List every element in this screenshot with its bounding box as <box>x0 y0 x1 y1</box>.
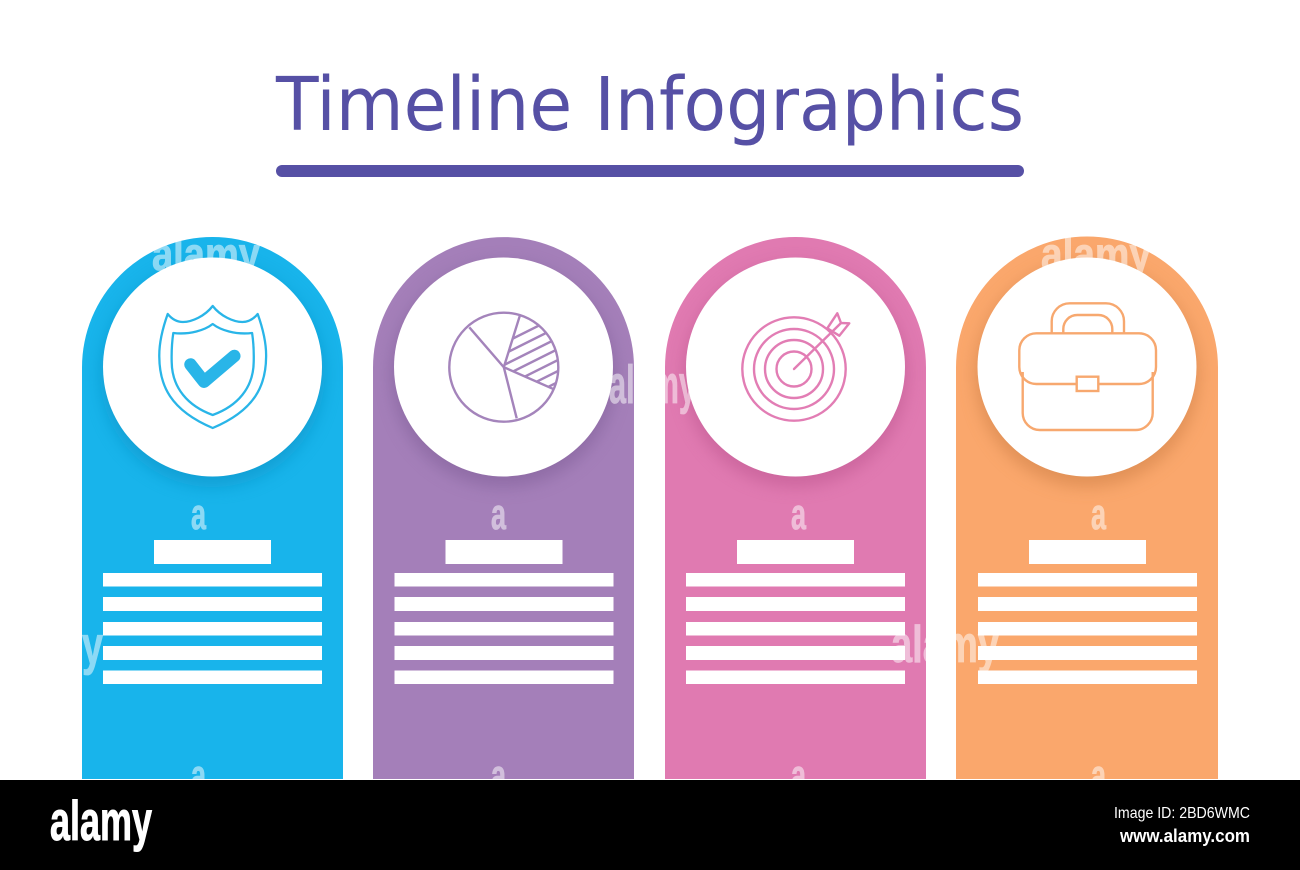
heading placeholder <box>446 540 562 564</box>
watermarks: a <box>191 751 206 800</box>
circle shadow <box>98 303 327 490</box>
title: Timeline Infographics <box>275 62 1024 148</box>
panel shape: pink <box>665 237 926 779</box>
circle shadow <box>972 298 1202 490</box>
watermarks: a <box>1091 490 1106 539</box>
text lines <box>686 573 905 684</box>
panel: target <box>665 237 926 779</box>
watermarks: a <box>491 490 506 539</box>
icon: briefcase <box>1019 303 1156 430</box>
text lines <box>103 573 322 684</box>
icon: target with arrow <box>742 313 849 421</box>
watermarks: alamy <box>609 355 696 415</box>
icon: pie chart <box>449 310 570 422</box>
white circle <box>686 258 905 476</box>
panel shape: blue <box>82 237 343 779</box>
watermarks: a <box>191 490 206 539</box>
panel: pie chart <box>373 237 634 779</box>
watermarks: y <box>82 616 103 676</box>
white circle <box>978 258 1196 476</box>
text lines <box>394 573 614 684</box>
footer bar <box>0 780 1300 870</box>
watermarks: a <box>791 490 806 539</box>
website: www.alamy.com <box>1119 826 1250 846</box>
heading placeholder <box>737 540 854 564</box>
panel shape: orange <box>956 237 1218 779</box>
white circle <box>394 258 613 476</box>
watermarks <box>82 228 1151 800</box>
watermarks: alamy <box>891 616 999 674</box>
watermarks: alamy <box>152 228 260 280</box>
circle shadow <box>682 315 910 489</box>
heading placeholder <box>1029 540 1146 564</box>
heading placeholder <box>154 540 271 564</box>
watermarks: alamy <box>1041 228 1151 280</box>
title underline <box>276 165 1024 177</box>
panel: briefcase <box>956 237 1218 779</box>
circle shadow <box>389 303 618 488</box>
icon: shield with check <box>159 306 266 428</box>
watermarks: a <box>1091 751 1106 800</box>
watermarks: a <box>791 751 806 800</box>
white circle <box>103 258 322 476</box>
footer logo: alamy <box>50 789 152 852</box>
image id: Image ID: 2BD6WMC <box>1114 805 1250 822</box>
watermarks: a <box>491 751 506 800</box>
panel shape: purple <box>373 237 634 779</box>
panel: shield <box>82 237 343 779</box>
text lines <box>978 573 1197 684</box>
